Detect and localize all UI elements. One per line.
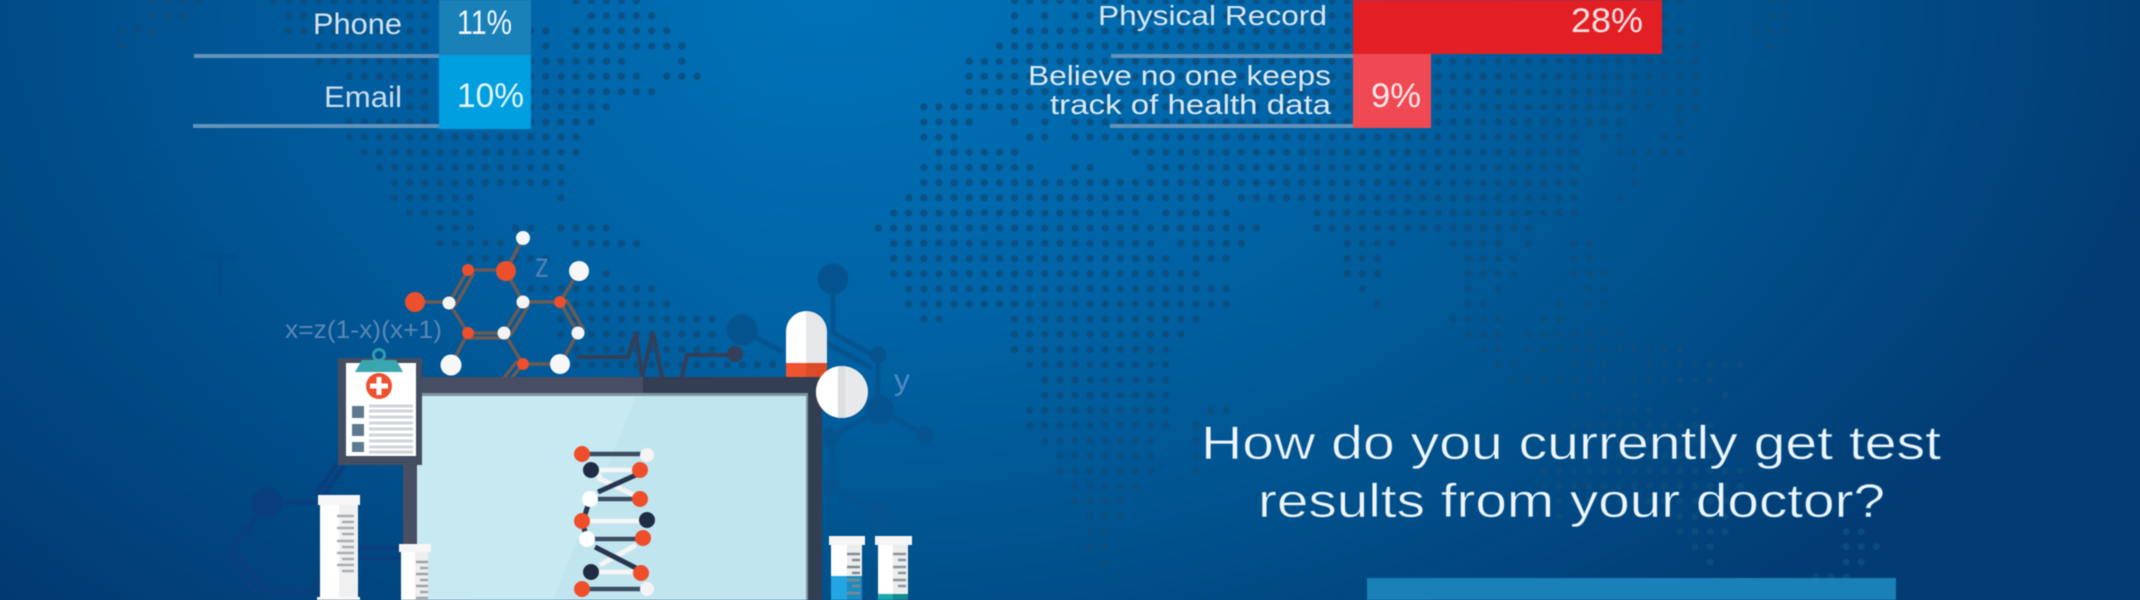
icon: medical clipboard xyxy=(338,350,422,465)
dotted world map xyxy=(122,1,1878,577)
bar: physical record 28% xyxy=(1353,0,1662,54)
molecule xyxy=(405,231,589,380)
test tube: large left xyxy=(317,495,360,600)
value: 28%: 28% xyxy=(1571,2,1643,40)
ECG line xyxy=(577,332,741,378)
bar: email 10% xyxy=(439,55,531,129)
test tube: teal liquid xyxy=(875,536,912,600)
monitor xyxy=(403,377,822,600)
equation text: x=z(1-x)(x+1) xyxy=(285,316,442,344)
heading: test results question: How do you currently get test xyxy=(1201,416,1941,469)
label: Physical Record: Physical Record xyxy=(1098,0,1327,31)
test tube: blue liquid xyxy=(829,536,865,600)
value: 11%: 11% xyxy=(457,4,512,42)
test tube: small left xyxy=(399,544,431,600)
value: 10%: 10% xyxy=(457,77,524,115)
faint letter T: T xyxy=(202,240,238,312)
monitor frame xyxy=(403,377,643,600)
label: believe no one keeps track of health data: Believe no one keeps xyxy=(1028,60,1331,91)
heading: test results question xyxy=(1201,416,1941,527)
background molecule: left xyxy=(226,464,400,596)
row divider lines xyxy=(1110,56,1353,126)
label: z: z xyxy=(535,246,549,285)
right chart: record keeping rows xyxy=(1028,0,1662,128)
label: believe no one keeps track of health data: track of health data xyxy=(1050,89,1331,120)
DNA helix xyxy=(574,446,655,597)
left chart: channel rows xyxy=(193,0,531,129)
row divider lines xyxy=(193,56,439,126)
icon: round pill xyxy=(816,366,868,418)
monitor screen xyxy=(417,393,808,600)
bar: phone 11% xyxy=(439,0,531,55)
value: 9%: 9% xyxy=(1371,77,1421,115)
label: Email: Email xyxy=(324,81,402,114)
label: y: y xyxy=(894,364,910,397)
bar: no one keeps track 9% xyxy=(1353,54,1431,128)
label: believe no one keeps track of health data xyxy=(1028,60,1331,120)
heading: test results question: results from your doctor? xyxy=(1258,474,1885,527)
bar: first answer, cropped at bottom xyxy=(1367,578,1896,600)
icon: capsule xyxy=(786,311,827,377)
label: Phone: Phone xyxy=(313,8,402,41)
background molecule: right xyxy=(729,266,931,527)
